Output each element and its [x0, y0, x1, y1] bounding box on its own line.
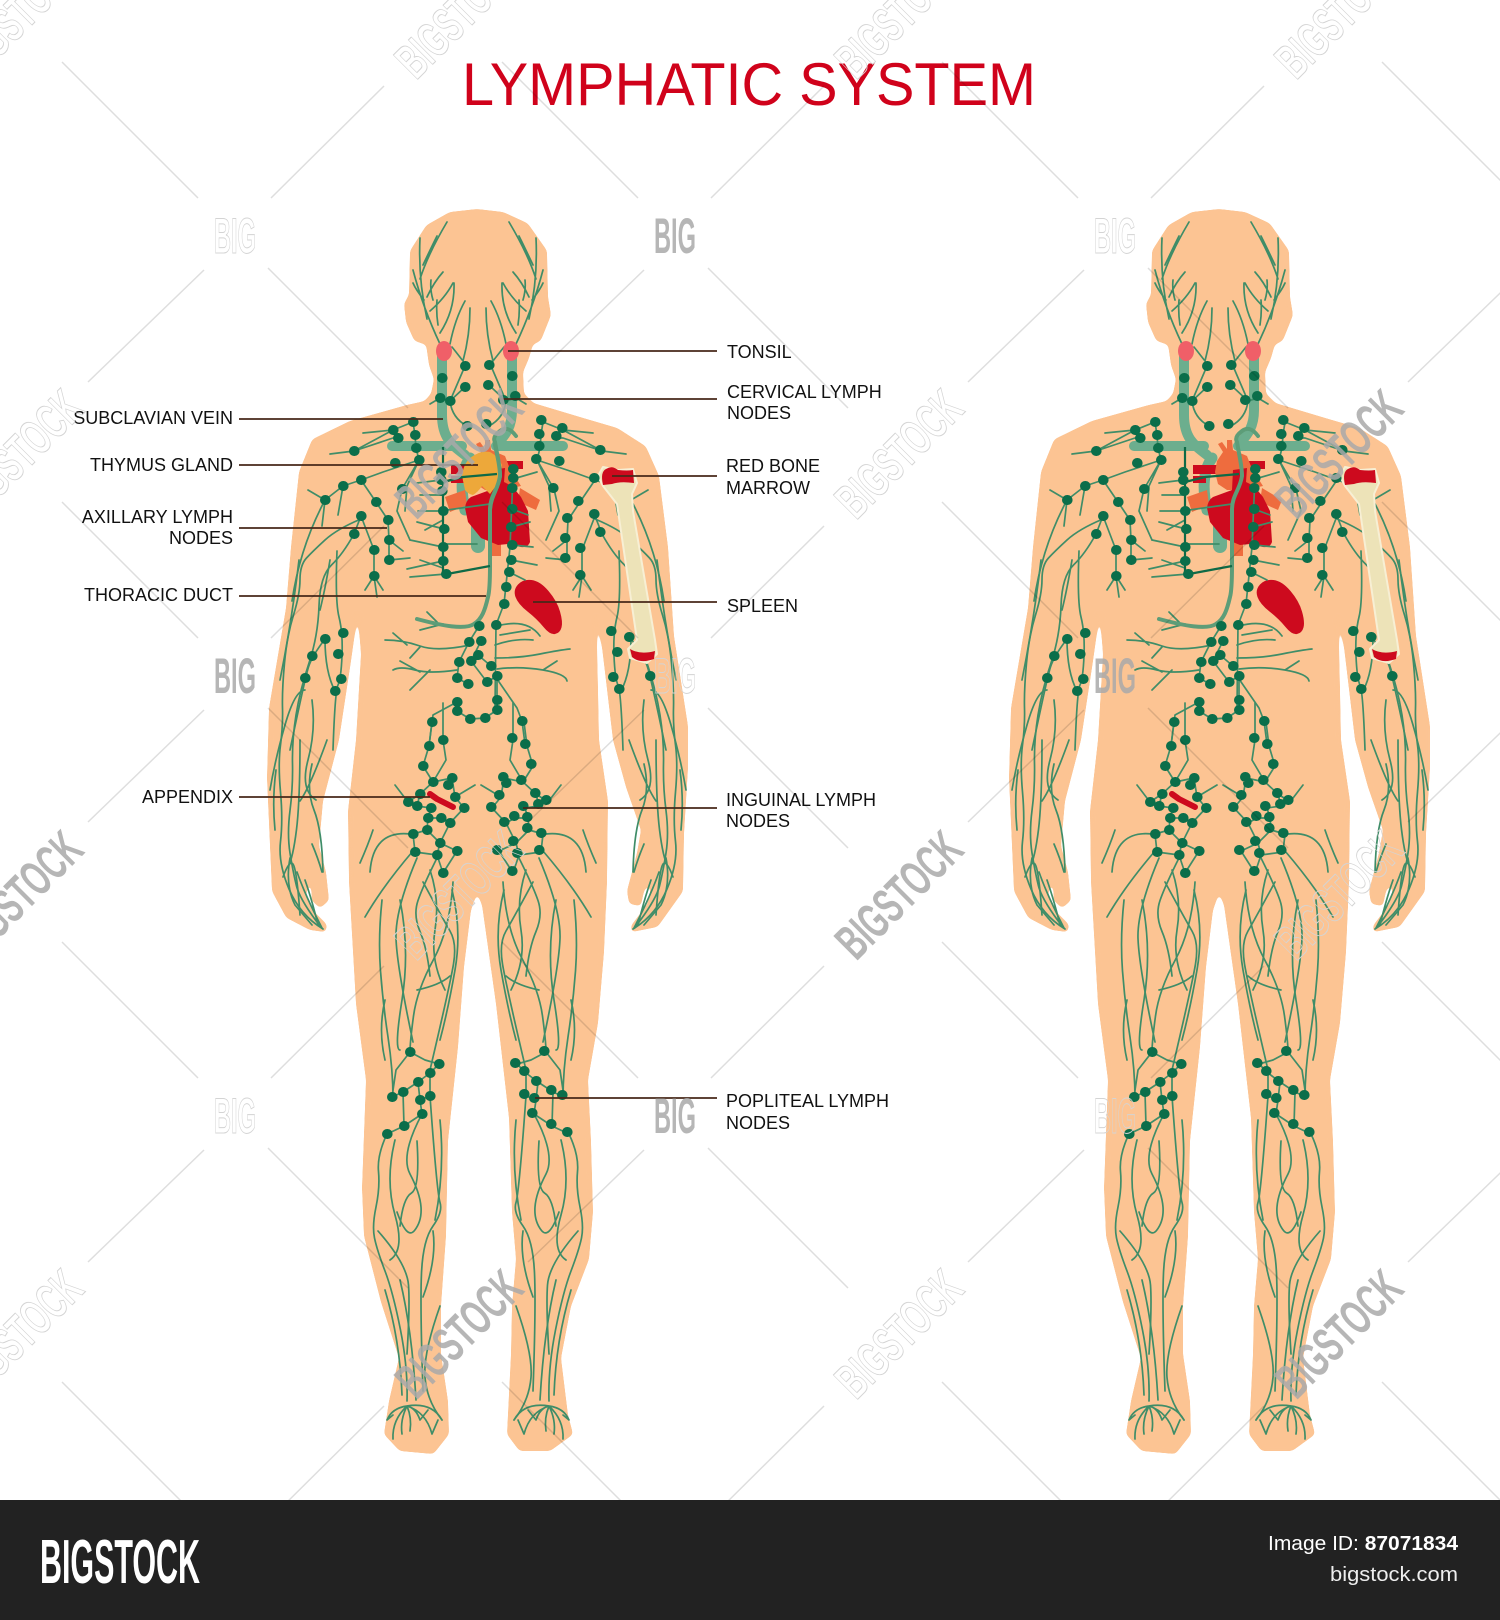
- watermark: BIGSTOCK diagonal stamps: BIGSTOCK: [384, 820, 534, 970]
- watermark: BIG stamps: BIG: [654, 208, 696, 264]
- bone with marrow: [598, 467, 657, 663]
- label: thoracic duct: THORACIC DUCT: [84, 585, 233, 605]
- lymph vessels: torso: [385, 472, 570, 746]
- watermark: BIG stamps: BIG: [654, 648, 696, 704]
- great veins: [392, 355, 563, 546]
- label: tonsil: TONSIL: [727, 342, 792, 362]
- watermark: BIG stamps: [214, 208, 1136, 1144]
- figure: right body, unlabelled: [1010, 210, 1429, 1453]
- label: popliteal lymph nodes: NODES: [726, 1113, 790, 1133]
- thymus gland: [462, 452, 502, 495]
- text: BIG: [1094, 1088, 1136, 1144]
- watermark: BIGSTOCK diagonal stamps: BIGSTOCK: [384, 379, 534, 529]
- label: axillary lymph nodes: AXILLARY LYMPH: [82, 507, 233, 527]
- label: cervical lymph nodes: NODES: [727, 403, 791, 423]
- label: spleen: SPLEEN: [727, 596, 798, 616]
- leader lines: [239, 351, 717, 1098]
- label: subclavian vein: SUBCLAVIAN VEIN: [73, 408, 233, 428]
- label: thymus gland: THYMUS GLAND: [90, 455, 233, 475]
- central lymphatic trunks: [443, 447, 497, 574]
- figure: left body, labelled: [268, 210, 687, 1453]
- watermark: BIGSTOCK diagonal stamps: BIGSTOCK: [1264, 820, 1414, 970]
- footer bar: [0, 1500, 1500, 1620]
- duct over thymus: [490, 445, 500, 510]
- lymph vessels: mirrored right half: [481, 222, 686, 1439]
- label: inguinal lymph nodes: INGUINAL LYMPH: [726, 790, 876, 810]
- spleen: [515, 580, 562, 634]
- label: red bone marrow: MARROW: [726, 478, 810, 498]
- tonsils: [436, 341, 519, 361]
- trunk over thymus: [443, 474, 497, 482]
- label: axillary lymph nodes: NODES: [169, 528, 233, 548]
- watermark: BIGSTOCK diagonal stamps: BIGSTOCK: [824, 820, 974, 970]
- image id: Image ID: 87071834: [1268, 1533, 1459, 1555]
- footer bar: BIGSTOCK: [40, 1528, 200, 1597]
- watermark: BIGSTOCK diagonal stamps: BIGSTOCK: [384, 1259, 534, 1409]
- watermark: BIGSTOCK diagonal stamps: BIGSTOCK: [1264, 379, 1414, 529]
- thoracic duct: [417, 429, 516, 627]
- body silhouette: [268, 210, 687, 1453]
- label: cervical lymph nodes: CERVICAL LYMPH: [727, 382, 882, 402]
- lymph vessels: left half: [270, 222, 475, 1439]
- label: appendix: APPENDIX: [142, 787, 233, 807]
- lymph nodes: [305, 365, 651, 1134]
- label: red bone marrow: RED BONE: [726, 456, 820, 476]
- label: popliteal lymph nodes: POPLITEAL LYMPH: [726, 1091, 889, 1111]
- watermark: BIG stamps: BIG: [214, 208, 256, 264]
- watermark: BIG stamps: BIG: [654, 1088, 696, 1144]
- watermark: BIGSTOCK diagonal stamps: BIGSTOCK: [824, 379, 974, 529]
- appendix: [430, 794, 453, 807]
- watermark: BIGSTOCK diagonal stamps: BIGSTOCK: [824, 1259, 974, 1409]
- title: LYMPHATIC SYSTEM: [462, 51, 1036, 118]
- label: inguinal lymph nodes: NODES: [726, 811, 790, 831]
- heart: [445, 440, 540, 556]
- watermark: BIG stamps: BIG: [214, 648, 256, 704]
- footer url: bigstock.com: [1330, 1564, 1458, 1586]
- text: BIG: [1094, 208, 1136, 264]
- watermark: BIGSTOCK diagonal stamps: BIGSTOCK: [1264, 1259, 1414, 1409]
- watermark: BIG stamps: BIG: [214, 1088, 256, 1144]
- text: BIG: [1094, 648, 1136, 704]
